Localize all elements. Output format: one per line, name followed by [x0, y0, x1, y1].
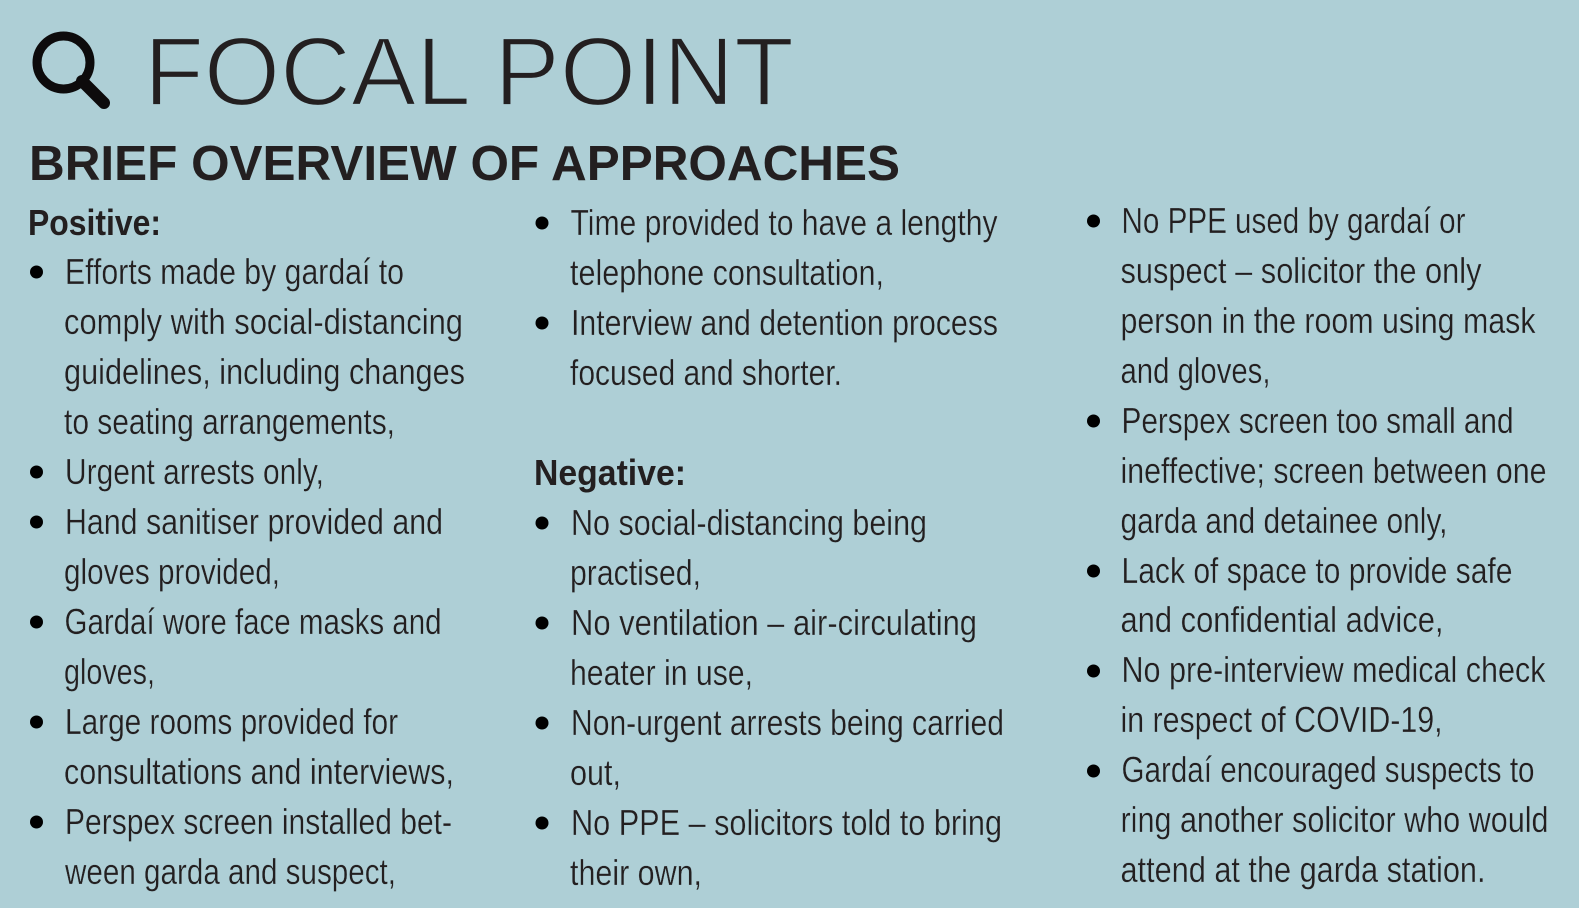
panel: negative approaches, third column: garda and detainee only,: [1120, 500, 1448, 541]
list: negative items: practised,: [570, 552, 701, 593]
panel: negative approaches, third column: in respect of COVID-19,: [1120, 699, 1442, 740]
list: positive items: Efforts made by gardaí to: [65, 251, 404, 292]
list: negative items: their own,: [570, 852, 702, 893]
list: positive items: [30, 251, 465, 892]
panel: second column: [534, 202, 1004, 893]
list: positive items continued: focused and shorter.: [570, 352, 842, 393]
list: positive items continued: [536, 202, 998, 393]
panel: negative approaches, third column: Lack of space to provide safe: [1122, 550, 1512, 591]
panel: positive approaches, first column: [28, 202, 465, 892]
list: negative items: Non-urgent arrests being carried: [571, 702, 1004, 743]
list: negative items: No PPE – solicitors told to bring: [571, 802, 1002, 843]
list: positive items: Large rooms provided for: [65, 701, 398, 742]
list: negative items: [536, 502, 1004, 893]
list: positive items: gloves,: [64, 651, 155, 692]
list: negative items: heater in use,: [570, 652, 753, 693]
panel: negative approaches, third column: suspect – solicitor the only: [1120, 250, 1482, 291]
list: positive items: comply with social-distancing: [64, 301, 463, 342]
icon: magnifying glass: [37, 36, 104, 103]
list: positive items: Perspex screen installed bet-: [65, 801, 452, 842]
list: positive items: gloves provided,: [64, 551, 280, 592]
list: positive items continued: Time provided to have a lengthy: [570, 202, 998, 243]
list: positive items: guidelines, including changes: [64, 351, 465, 392]
list: positive items: Hand sanitiser provided and: [65, 501, 443, 542]
list: positive items: ween garda and suspect,: [64, 851, 396, 892]
list: positive items continued: Interview and detention process: [571, 302, 998, 343]
panel: negative approaches, third column: [1087, 200, 1548, 890]
list: positive items continued: telephone consultation,: [570, 252, 884, 293]
title: FOCAL POINT: [144, 17, 794, 126]
heading: positive: Positive:: [28, 202, 161, 243]
list: positive items: consultations and interviews,: [64, 751, 454, 792]
list: negative items: No social-distancing being: [571, 502, 927, 543]
panel: negative approaches, third column: and confidential advice,: [1120, 599, 1444, 640]
panel: negative approaches, third column: attend at the garda station.: [1120, 849, 1486, 890]
list: positive items: Gardaí wore face masks and: [64, 601, 442, 642]
list: negative items: No ventilation – air-circulating: [571, 602, 977, 643]
header: [37, 17, 794, 126]
panel: negative approaches, third column: No PPE used by gardaí or: [1122, 200, 1466, 241]
list: positive items: Urgent arrests only,: [65, 451, 324, 492]
subtitle: BRIEF OVERVIEW OF APPROACHES: [29, 137, 900, 191]
panel: negative approaches, third column: and gloves,: [1120, 350, 1270, 391]
list: positive items: to seating arrangements,: [64, 401, 395, 442]
heading: negative: Negative:: [534, 452, 686, 493]
list: negative items: out,: [570, 752, 621, 793]
